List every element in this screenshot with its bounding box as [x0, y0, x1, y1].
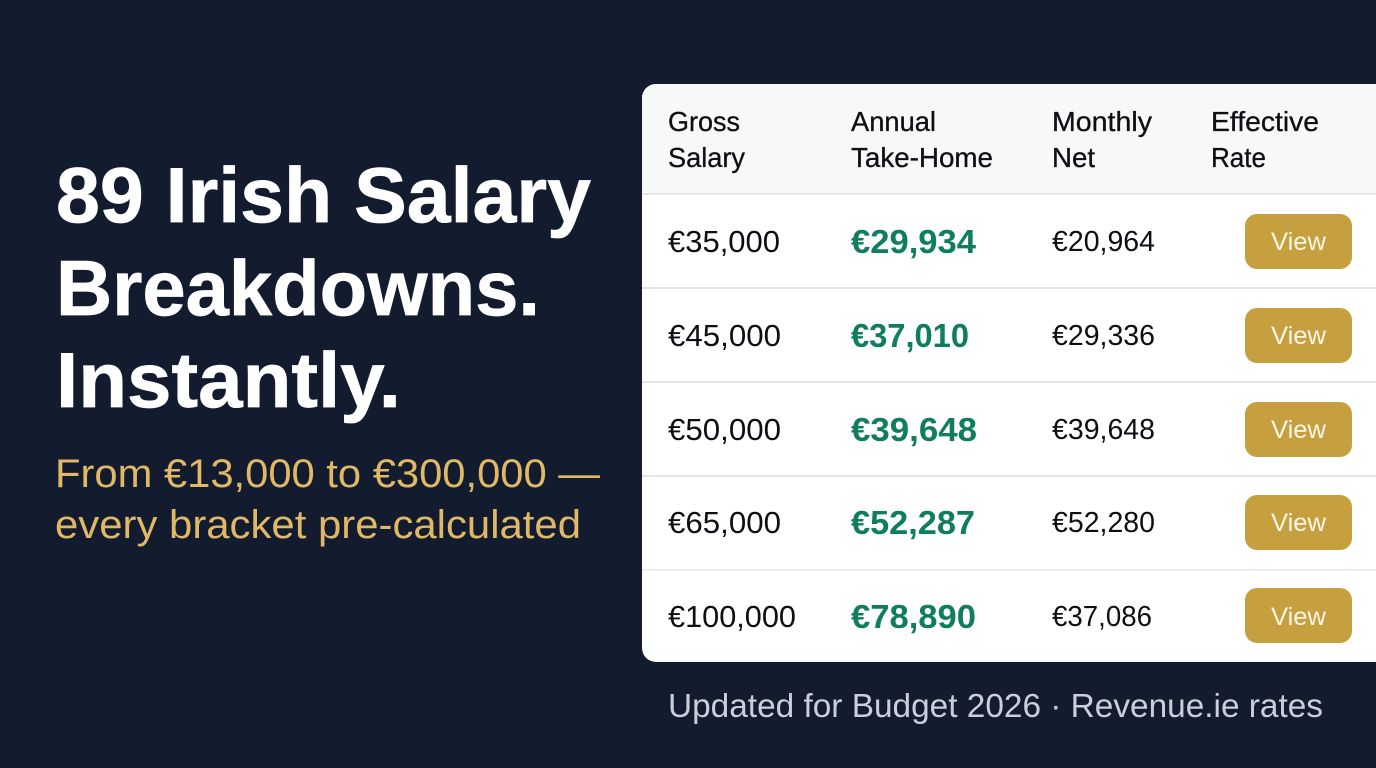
row: €35,000: €29,934 — [851, 223, 977, 260]
row: €65,000: View — [1271, 509, 1327, 537]
row: €100,000: €37,086 — [1052, 601, 1152, 633]
row: €35,000: €20,964 — [1052, 226, 1155, 258]
footer note: Updated for Budget 2026 · Revenue.ie rates — [668, 687, 1323, 724]
table header row: Annual — [851, 106, 936, 137]
row: €50,000: €50,000 — [668, 412, 781, 447]
row: €65,000: €52,280 — [1052, 507, 1155, 539]
table header row: Monthly — [1052, 106, 1152, 137]
row: €100,000: €100,000 — [668, 599, 796, 634]
row: €50,000: View — [1271, 416, 1327, 444]
row: €45,000: €29,336 — [1052, 320, 1155, 352]
table card background — [642, 84, 1376, 662]
row: €65,000: €65,000 — [668, 505, 781, 540]
row: €65,000: €52,287 — [851, 504, 975, 541]
table header row: Net — [1052, 142, 1095, 173]
title: Breakdowns. — [56, 244, 540, 332]
subtitle: every bracket pre-calculated — [55, 503, 581, 547]
row: €100,000: View — [1271, 603, 1327, 631]
row: €50,000: €39,648 — [851, 411, 977, 448]
row: €100,000 — [668, 588, 1352, 643]
title: 89 Irish Salary — [56, 151, 591, 239]
table header row — [642, 84, 1376, 194]
subtitle: From €13,000 to €300,000 — — [55, 452, 600, 496]
table header row: Effective — [1211, 106, 1319, 137]
table header row: Take-Home — [851, 142, 993, 173]
row: €65,000 — [668, 495, 1352, 550]
row: €35,000 — [668, 214, 1352, 269]
panel: salary table — [642, 84, 1376, 662]
row: €45,000 — [668, 308, 1352, 363]
title — [56, 151, 591, 424]
table header row: Rate — [1211, 142, 1266, 173]
row: €35,000: View — [1271, 228, 1327, 256]
row: €45,000: €37,010 — [851, 317, 969, 354]
table header row: Salary — [668, 142, 745, 173]
row: €100,000: €78,890 — [851, 598, 976, 635]
subtitle — [55, 452, 600, 547]
row: €45,000: €45,000 — [668, 318, 781, 353]
row: €50,000 — [668, 402, 1352, 457]
table header row: Gross — [668, 106, 740, 137]
row: €45,000: View — [1271, 322, 1327, 350]
row: €50,000: €39,648 — [1052, 414, 1155, 446]
title: Instantly. — [56, 336, 401, 424]
row: €35,000: €35,000 — [668, 224, 780, 259]
